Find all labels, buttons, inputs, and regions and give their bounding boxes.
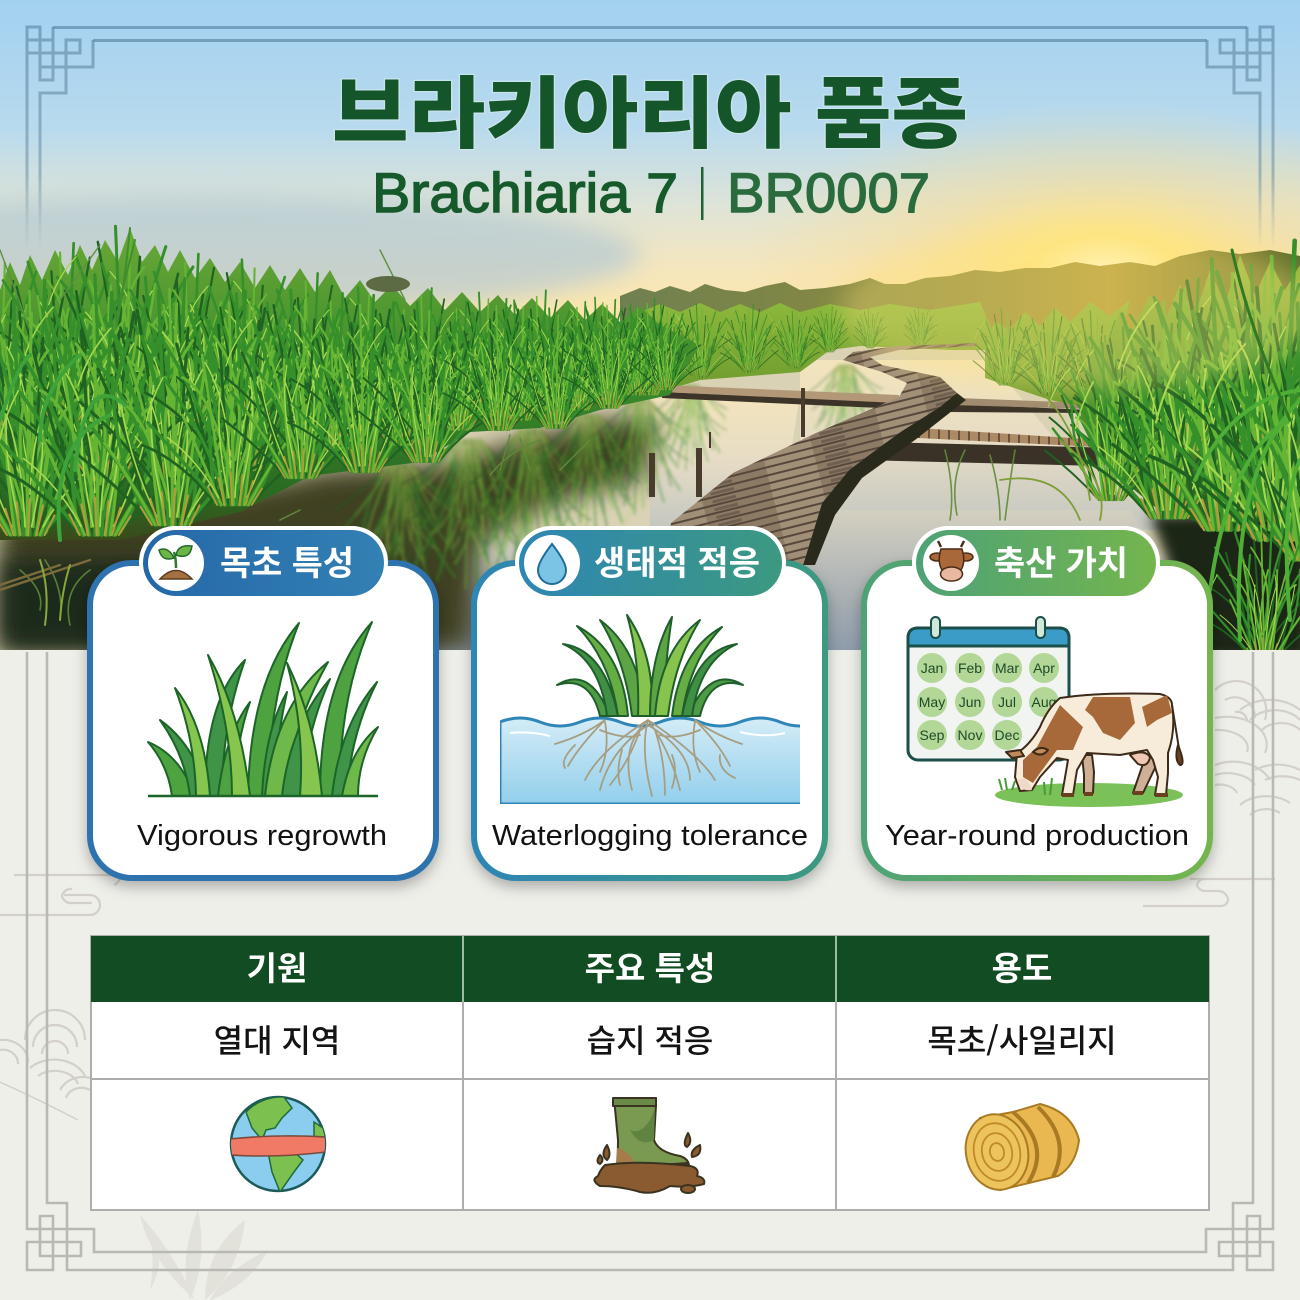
row text: 습지 적응: [587, 1016, 713, 1062]
faint bamboo leaves: [140, 1210, 268, 1300]
caption: Vigorous regrowth: [137, 820, 387, 852]
ornamental frame over sky: [27, 27, 1273, 250]
header labels: 주요 특성: [585, 942, 715, 990]
left reed clumps middle row: [0, 275, 675, 480]
frame top lines: [53, 28, 1247, 40]
boardwalk shadow: [803, 393, 966, 565]
cloud scroll left: [0, 875, 120, 915]
month labels: Mar: [995, 660, 1019, 676]
muzzle: [1017, 778, 1032, 790]
icon: cow head: [930, 541, 973, 581]
ear: [1006, 750, 1024, 758]
month labels: Jan: [921, 660, 943, 676]
left reed mass: [0, 228, 700, 540]
distant grass band: [644, 302, 991, 386]
month labels: May: [919, 694, 945, 710]
sunlit wash over grass: [840, 230, 1300, 390]
rump patch: [1142, 695, 1172, 727]
wave pattern left: [0, 1010, 90, 1098]
month labels: Jun: [959, 694, 981, 710]
sun glow: [799, 114, 1300, 288]
icon: muddy boot: [594, 1098, 704, 1193]
cloud scroll right: [1143, 879, 1275, 906]
udder: [1130, 752, 1150, 765]
left reed clumps back row: [0, 226, 690, 430]
sky: [0, 0, 1300, 320]
header labels: [247, 942, 1052, 990]
foreground blades right: [1000, 250, 1300, 640]
cross walkways: [662, 385, 1118, 466]
ornamental frame over paper: [27, 652, 1273, 1270]
shoulder patch: [1023, 705, 1083, 783]
title: 브라키아리아 품종: [332, 52, 968, 164]
background photo: wetland at sunrise: [0, 0, 1300, 660]
table body: [91, 936, 1209, 1210]
table grid lines: [91, 936, 1209, 1210]
faint diagonal stem: [0, 1082, 78, 1120]
icon: water drop: [538, 544, 566, 584]
heading pill: [515, 526, 786, 598]
icon: tropical globe: [230, 1097, 326, 1192]
left reed clumps front row: [0, 290, 702, 535]
card body: [90, 563, 436, 878]
water base: [0, 346, 1188, 650]
main wooden boardwalk: [670, 343, 977, 565]
heading pill: [912, 526, 1160, 598]
icon: grass regrowth: [148, 622, 378, 796]
frame top left corner: [27, 27, 93, 250]
distant tree line: [620, 250, 1300, 330]
icon: sprout: [159, 546, 192, 579]
foreground debris left: [0, 560, 90, 625]
month labels: Dec: [995, 727, 1019, 743]
distant grass clumps: [669, 304, 937, 378]
tail: [1172, 705, 1180, 755]
heading pill: 축산 가치: [994, 536, 1128, 585]
far legs: [1082, 755, 1155, 793]
table header row: [91, 936, 1209, 1002]
reeds in the water: [20, 435, 1015, 625]
panel: livestock value: [864, 526, 1210, 878]
tufts: [999, 778, 1052, 795]
row text: 열대 지역: [214, 1016, 340, 1062]
heading pill: [139, 526, 388, 598]
card body: [474, 563, 825, 878]
month labels: Aug: [1032, 694, 1056, 710]
right middle clumps: [972, 308, 1116, 400]
ground: [995, 783, 1183, 807]
wave pattern right: [1215, 681, 1300, 815]
knot bottom right: [1219, 1216, 1273, 1270]
month labels: Nov: [958, 727, 982, 743]
grass reflections in the water: [335, 365, 882, 608]
water: [500, 718, 820, 804]
decorative paper patterns: [0, 681, 1300, 1120]
bright long blades left: [0, 228, 405, 540]
cow body: [1015, 694, 1173, 795]
heading pill: 목초 특성: [220, 536, 354, 585]
card body: [864, 563, 1210, 878]
month labels: Feb: [958, 660, 982, 676]
water tones: [0, 360, 1300, 660]
frame top right corner: [1207, 27, 1273, 250]
knot bottom left: [27, 1216, 81, 1270]
right reed mass: [1080, 255, 1300, 525]
row text: [214, 1016, 1117, 1062]
month labels: Apr: [1033, 660, 1055, 676]
month labels: Jul: [998, 694, 1016, 710]
header labels: 용도: [992, 942, 1052, 990]
right reed clumps: [1045, 241, 1300, 660]
hooves: [1062, 793, 1168, 795]
grass clumps: [557, 615, 743, 716]
caption: Waterlogging tolerance: [492, 820, 808, 852]
tree behind reeds: [366, 276, 410, 292]
month labels: [919, 660, 1056, 743]
subtitle: BR0007: [727, 161, 930, 224]
right middle grass: [985, 300, 1130, 410]
panel: forage traits: [90, 526, 436, 878]
summary table: [91, 936, 1209, 1210]
subtitle: Brachiaria 7: [372, 161, 678, 224]
roots: [555, 720, 742, 796]
month labels: Sep: [920, 727, 945, 743]
icon: grazing cow: [995, 694, 1183, 807]
panel: ecological adaptation: [474, 526, 825, 878]
cool left sky tint: [0, 195, 640, 315]
walkway posts: [649, 388, 805, 497]
icon: calendar: [908, 617, 1069, 760]
row text: 목초/사일리지: [927, 1016, 1117, 1062]
heading pill: 생태적 적응: [594, 536, 760, 585]
header labels: 기원: [247, 942, 307, 990]
caption: Year-round production: [885, 820, 1189, 852]
icon: waterlogged roots: [500, 615, 820, 804]
subtitle: [372, 161, 930, 224]
icon: hay bale: [959, 1104, 1079, 1196]
month dots: [917, 653, 1059, 750]
inner frame line: [47, 652, 1253, 1270]
outer frame line: [27, 652, 1273, 1252]
back patch: [1085, 697, 1135, 740]
